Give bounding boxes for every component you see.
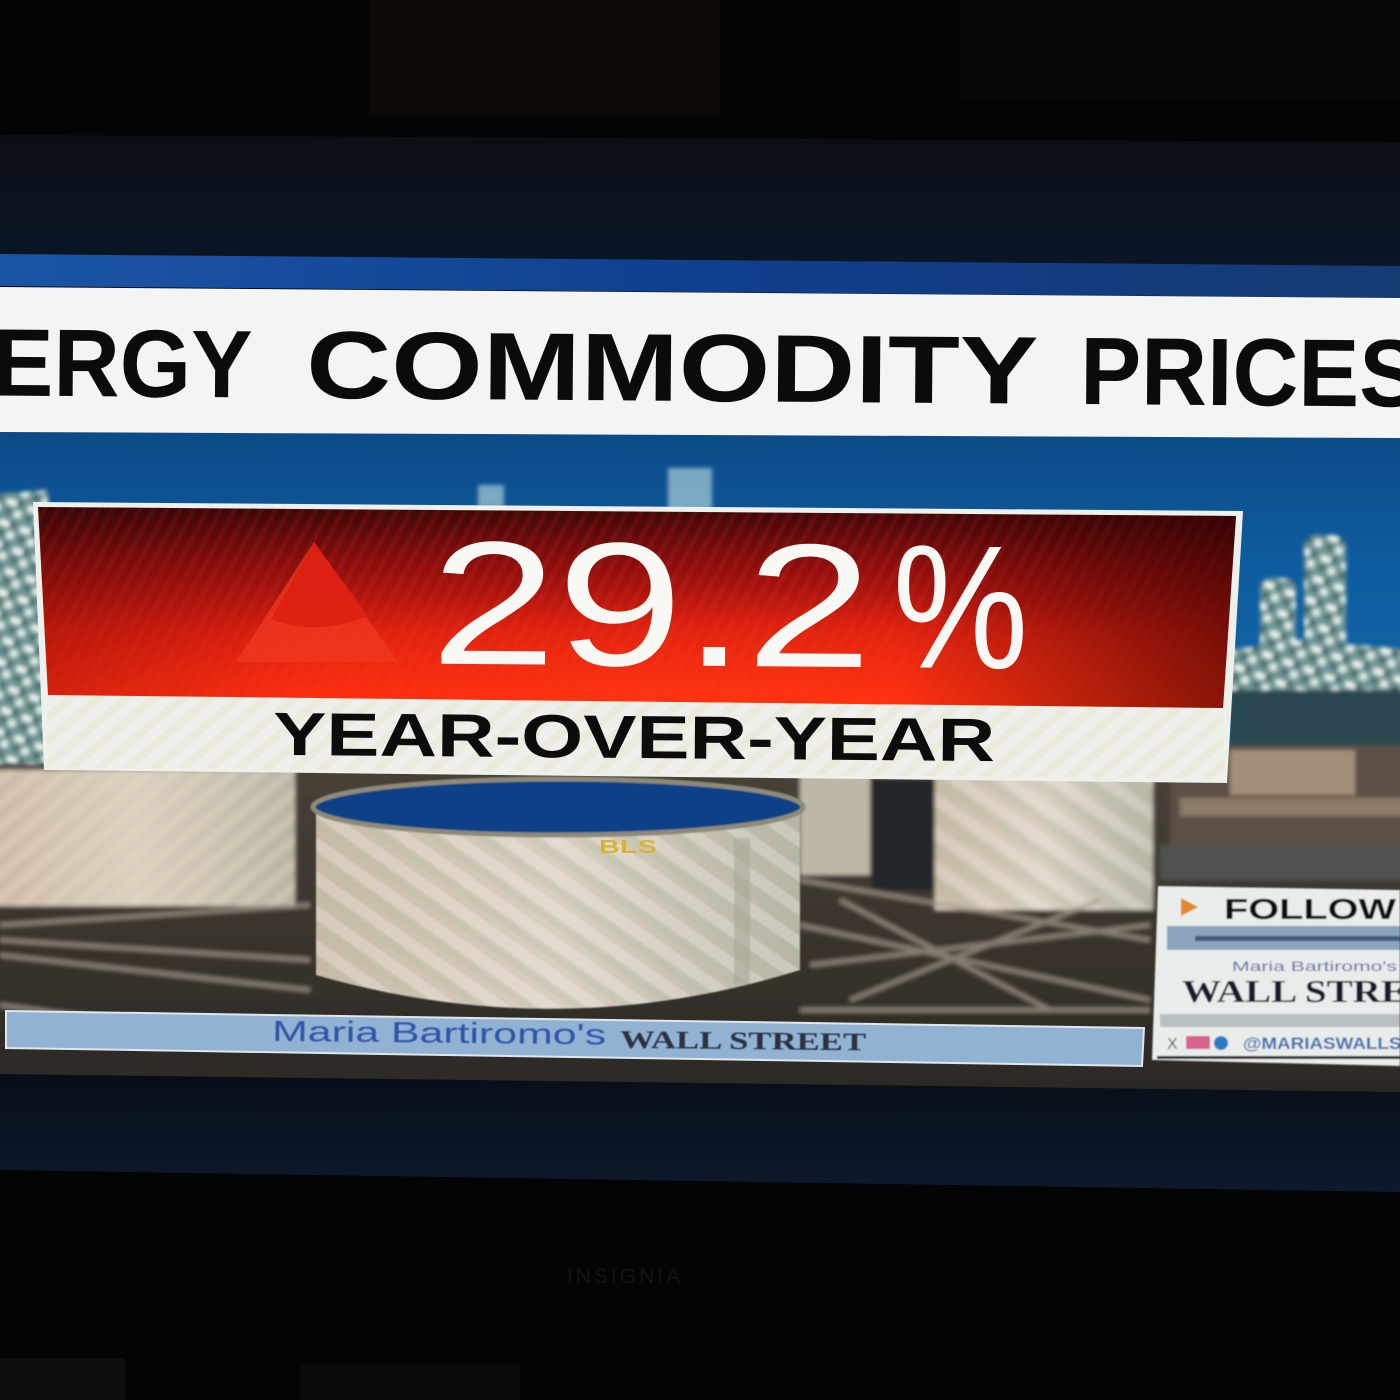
follow label: FOLLOW <box>1224 894 1397 926</box>
headline band <box>0 287 1400 438</box>
social icons <box>1167 1036 1228 1053</box>
central storage tank <box>313 779 803 1009</box>
lower third bar <box>6 1011 1144 1066</box>
tv brand logo: INSIGNIA <box>567 1265 683 1288</box>
icon: orange arrow <box>1181 898 1198 916</box>
refinery photo background <box>0 430 1400 1110</box>
tv bezel bottom <box>0 1074 1400 1192</box>
headline text: ERGY <box>0 309 253 418</box>
ground and tanks <box>0 745 1400 1110</box>
blue stripe <box>1167 926 1400 950</box>
callout panel: year-over-year change <box>33 502 1243 783</box>
follow panel <box>1152 886 1400 1066</box>
left tank <box>0 770 295 906</box>
black rule <box>1157 1056 1400 1059</box>
social handle: @MARIASWALLST <box>1243 1034 1400 1053</box>
building right <box>1170 745 1400 850</box>
BLS label on tank: BLS <box>599 837 657 857</box>
percent value: 29.2 <box>430 506 873 705</box>
wall street wordmark: WALL STRE <box>1182 973 1400 1009</box>
red gradient field <box>38 507 1236 708</box>
grey bar <box>1160 1014 1400 1027</box>
caption text: YEAR-OVER-YEAR <box>273 700 995 774</box>
percent value: % <box>892 509 1029 706</box>
headline text <box>0 309 1400 428</box>
right tank <box>935 775 1153 910</box>
pipes <box>0 880 1150 1045</box>
program name: Maria Bartiromo's <box>272 1016 606 1051</box>
white caption strip <box>47 695 1225 779</box>
social icons: X <box>1167 1036 1178 1053</box>
wall street wordmark: WALL STREET <box>620 1027 867 1056</box>
percent value <box>430 506 1029 706</box>
refinery structures <box>0 468 1400 770</box>
headline text: COMMODITY <box>306 312 1039 425</box>
tv bezel top <box>0 135 1400 268</box>
small show name: Maria Bartiromo's <box>1232 958 1397 974</box>
blue strip above headline <box>0 254 1400 298</box>
icon: up triangle <box>236 542 398 662</box>
